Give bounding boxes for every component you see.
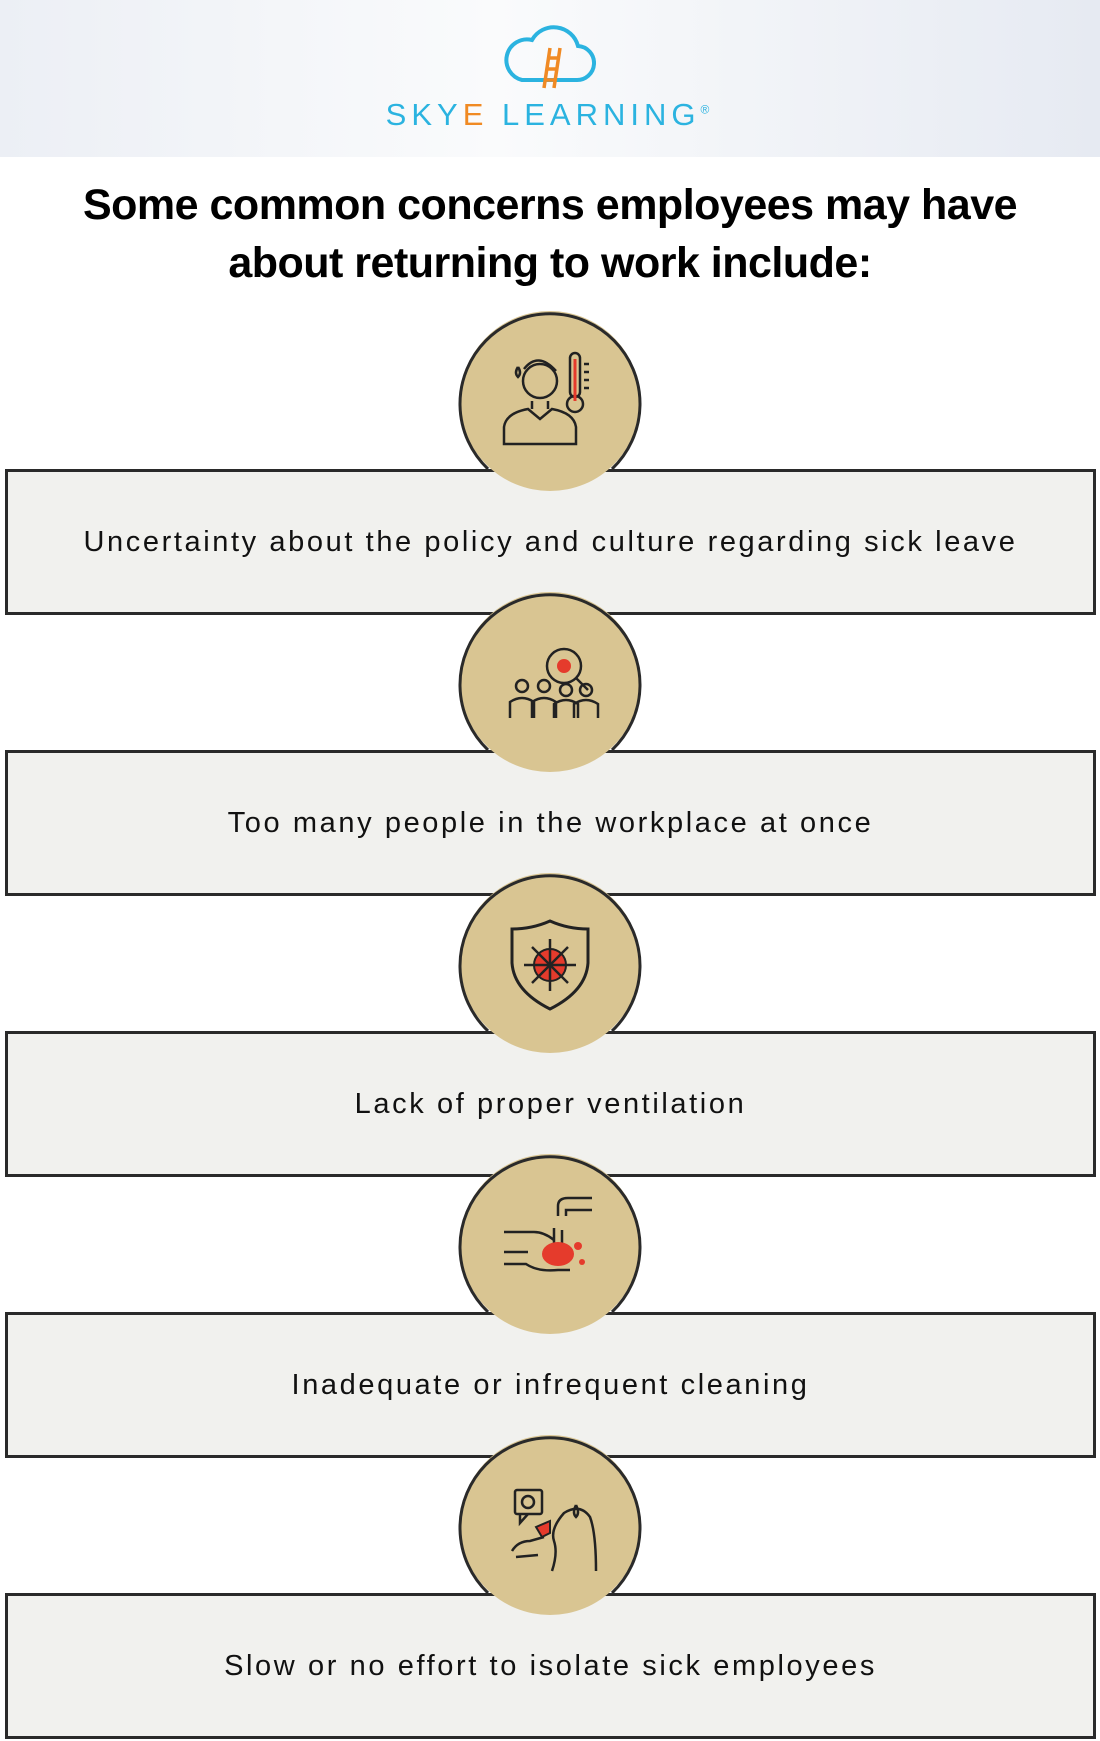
icon: shield with virus bbox=[458, 873, 642, 1053]
logo text: SKYE LEARNING® bbox=[386, 97, 714, 132]
panel: item 5 bbox=[5, 1593, 1096, 1739]
panel: item 2: Too many people in the workplace at once bbox=[228, 807, 873, 839]
panel: item 3 bbox=[5, 1031, 1096, 1177]
icon: people with virus magnifier bbox=[458, 592, 642, 772]
panel: item 3: Lack of proper ventilation bbox=[355, 1088, 746, 1120]
icon: sick person with thermometer bbox=[458, 311, 642, 491]
logo: cloud with ladder bbox=[504, 25, 596, 88]
title: Some common concerns employees may have bbox=[83, 181, 1017, 229]
panel: item 1: Uncertainty about the policy and culture regarding sick leave bbox=[84, 526, 1017, 558]
icon: temperature check bbox=[458, 1435, 642, 1615]
header band bbox=[0, 0, 1100, 157]
panel: item 4: Inadequate or infrequent cleaning bbox=[292, 1369, 809, 1401]
title: about returning to work include: bbox=[228, 239, 872, 287]
icon: hand washing bbox=[458, 1154, 642, 1334]
panel: item 1 bbox=[5, 469, 1096, 615]
panel: item 4 bbox=[5, 1312, 1096, 1458]
panel: item 5: Slow or no effort to isolate sick employees bbox=[224, 1650, 877, 1682]
panel: item 2 bbox=[5, 750, 1096, 896]
title bbox=[83, 181, 1017, 287]
